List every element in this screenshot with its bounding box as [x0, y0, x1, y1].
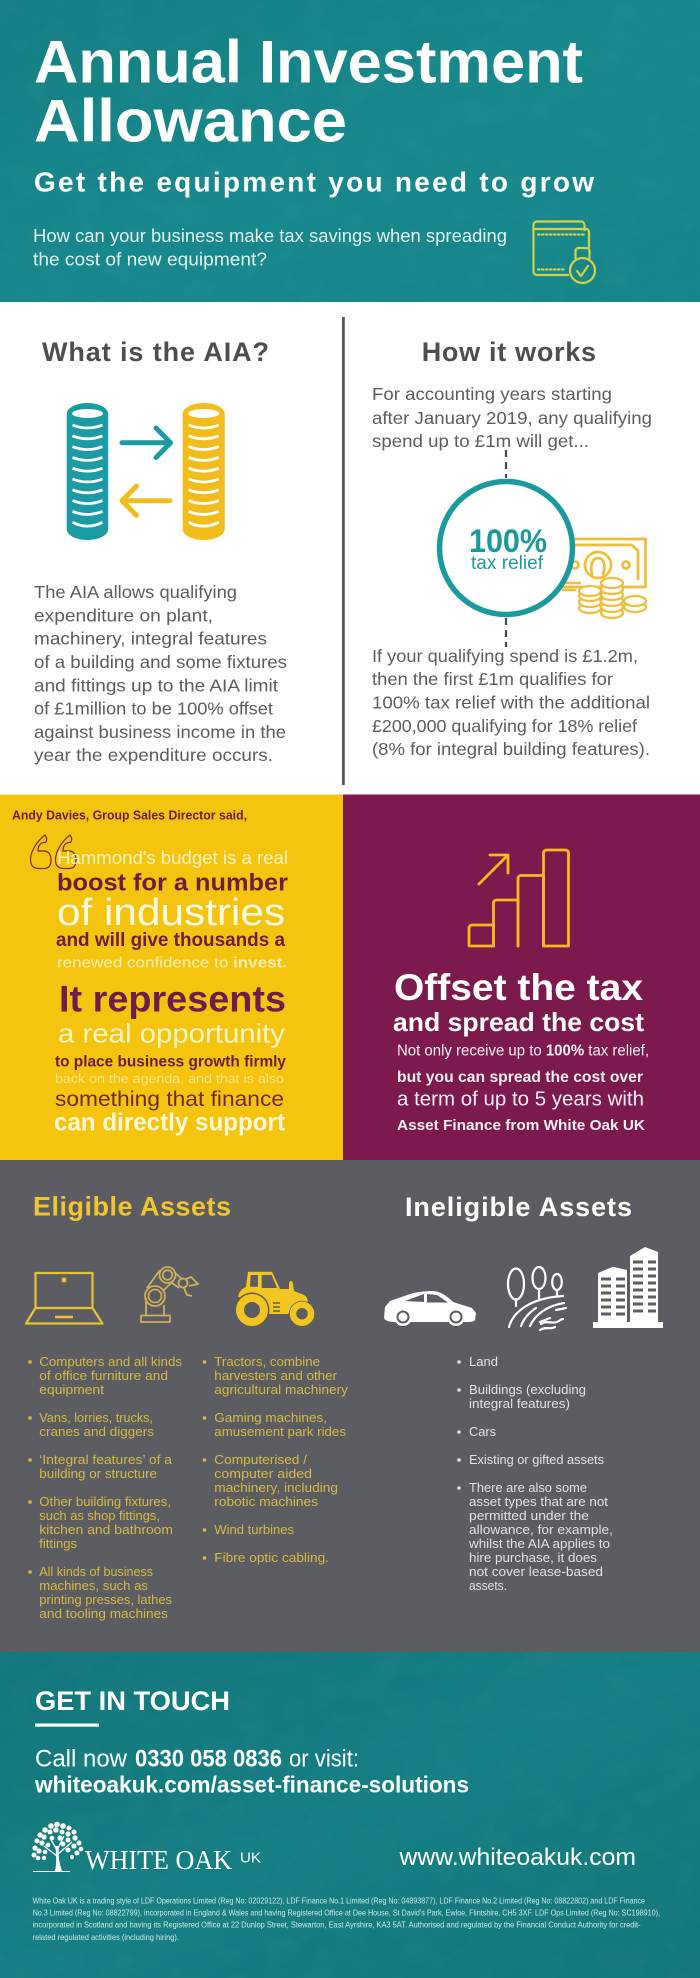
- list: eligible assets column two: Computerised /: [214, 1452, 307, 1467]
- text: qualifying spend example: then the first £1m qualifies for: [372, 669, 613, 689]
- heading: eligible assets: Eligible Assets: [33, 1192, 231, 1222]
- heading: what is the AIA: What is the AIA?: [42, 337, 269, 367]
- heading: how it works: How it works: [422, 337, 596, 367]
- list: ineligible assets: There are also some: [469, 1480, 587, 1495]
- dashed connector: top: [505, 450, 507, 478]
- quote text: Hammond's budget is a real: [57, 848, 288, 868]
- list: eligible assets column one: printing presses, lathes: [39, 1592, 172, 1607]
- panel: offset the tax: [343, 794, 700, 1160]
- list: eligible assets column two: Tractors, combine: [214, 1354, 320, 1369]
- list: eligible assets column one: of office furniture and: [39, 1368, 168, 1383]
- heading: ineligible assets: Ineligible Assets: [405, 1192, 632, 1222]
- text: AIA explanation: of a building and some fixtures: [34, 652, 287, 672]
- text: qualifying spend example: [372, 646, 650, 759]
- subheading: spread the cost: and spread the cost: [393, 1007, 644, 1037]
- list: ineligible assets: not cover lease-based: [469, 1564, 603, 1579]
- list: ineligible assets: permitted under the: [469, 1508, 589, 1523]
- list: eligible assets column two: Wind turbines: [214, 1522, 294, 1537]
- text: qualifying spend intro: For accounting years starting: [372, 384, 612, 404]
- contact details: Call now: [35, 1746, 128, 1773]
- website address: www.whiteoakuk.com: [398, 1844, 636, 1871]
- intro question: [33, 226, 507, 270]
- legal text: [33, 1896, 660, 1942]
- text: asset finance offer: a term of up to 5 years with: [397, 1088, 644, 1111]
- list: eligible assets column two: harvesters and other: [214, 1368, 338, 1383]
- list: eligible assets column two: Gaming machines,: [214, 1410, 327, 1425]
- list: eligible assets column one: [28, 1354, 183, 1621]
- divider: between AIA and how it works: [342, 317, 345, 785]
- contact details: or visit:: [289, 1746, 359, 1773]
- list: ineligible assets: asset types that are not: [469, 1494, 608, 1509]
- list: ineligible assets: assets.: [469, 1578, 507, 1593]
- panel: quote: [0, 794, 343, 1160]
- text: qualifying spend example: £200,000 qualifying for 18% relief: [372, 716, 637, 736]
- text: AIA explanation: of £1million to be 100% offset: [34, 698, 273, 718]
- text: qualifying spend example: (8% for integral building features).: [372, 739, 650, 759]
- list: eligible assets column one: Other building fixtures,: [39, 1494, 171, 1509]
- panel: assets: [0, 1160, 700, 1652]
- quote text: renewed confidence to invest.: [57, 954, 287, 971]
- quote text: a real opportunity: [58, 1019, 286, 1049]
- legal text: related regulated activities (including hiring).: [33, 1933, 179, 1942]
- text: AIA explanation: machinery, integral features: [34, 629, 267, 649]
- list: eligible assets column one: such as shop fittings,: [39, 1508, 160, 1523]
- panel: how it works: [372, 337, 652, 759]
- icon: rising bar chart with arrow: [469, 850, 568, 946]
- icon: laptop: [26, 1273, 102, 1324]
- text: AIA explanation: [34, 582, 287, 765]
- list: eligible assets column one: fittings: [39, 1536, 77, 1551]
- list: eligible assets column one: cranes and diggers: [39, 1424, 155, 1439]
- text: qualifying spend example: 100% tax relief with the additional: [372, 692, 650, 712]
- quote text: [54, 848, 288, 1137]
- legal text: incorporated in Scotland and having its Registered Office at 22 Dunlop Street, Stewarton, East Ayrshire, KA3 5AT. Authorised and regulated by the Financial Conduct Authority for credit-: [33, 1921, 641, 1930]
- icon: car: [384, 1291, 476, 1326]
- list: ineligible assets: Cars: [469, 1424, 496, 1439]
- text: qualifying spend intro: [372, 384, 652, 451]
- attribution: Andy Davies, Group Sales Director said,: [12, 807, 247, 822]
- subtitle: Get the equipment you need to grow: [34, 167, 594, 198]
- text: asset finance offer: [397, 1043, 649, 1134]
- list: ineligible assets: hire purchase, it does: [469, 1550, 598, 1565]
- quote text: It represents: [59, 979, 286, 1020]
- quote text: boost for a number: [57, 870, 288, 897]
- callout: 100% tax relief circle: 100%: [469, 523, 547, 559]
- title: [34, 29, 583, 155]
- text: AIA explanation: expenditure on plant,: [34, 605, 213, 625]
- contact details: whiteoakuk.com/asset-finance-solutions: [34, 1772, 469, 1798]
- arrow: right teal: [122, 428, 170, 458]
- text: asset finance offer: Not only receive up to 100% tax relief,: [397, 1043, 649, 1060]
- intro question: How can your business make tax savings when spreading: [33, 226, 507, 246]
- list: ineligible assets: integral features): [469, 1396, 570, 1411]
- text: qualifying spend intro: spend up to £1m will get...: [372, 431, 589, 451]
- list: eligible assets column two: agricultural machinery: [214, 1382, 349, 1397]
- list: eligible assets column one: equipment: [39, 1382, 104, 1397]
- panel: header: [0, 0, 700, 302]
- list: ineligible assets: Buildings (excluding: [469, 1382, 586, 1397]
- title: Allowance: [34, 88, 347, 155]
- callout: 100% tax relief circle: tax relief: [471, 553, 544, 574]
- list: ineligible assets: whilst the AIA applies to: [468, 1536, 610, 1551]
- text: qualifying spend intro: after January 2019, any qualifying: [372, 408, 652, 428]
- quote text: something that finance: [55, 1088, 284, 1111]
- list: eligible assets column one: Vans, lorries, trucks,: [39, 1410, 153, 1425]
- list: eligible assets column two: amusement park rides: [214, 1424, 346, 1439]
- list: eligible assets column one: kitchen and bathroom: [39, 1522, 173, 1537]
- arrow: left yellow: [122, 486, 170, 516]
- list: eligible assets column two: machinery, including: [214, 1480, 338, 1495]
- text: asset finance offer: but you can spread the cost over: [397, 1069, 643, 1086]
- list: ineligible assets: Land: [469, 1354, 498, 1369]
- list: eligible assets column two: computer aided: [214, 1466, 312, 1481]
- icon: trees and land: [508, 1267, 566, 1330]
- icon: teal coin stack: [67, 403, 108, 540]
- icon: yellow coin stack: [183, 403, 225, 540]
- list: eligible assets column two: Fibre optic cabling.: [214, 1550, 329, 1565]
- intro question: the cost of new equipment?: [33, 250, 267, 270]
- icon: wallet with lock: [534, 222, 595, 283]
- list: eligible assets column one: All kinds of business: [39, 1564, 153, 1579]
- text: AIA explanation: The AIA allows qualifying: [34, 582, 237, 602]
- quote text: to place business growth firmly: [55, 1054, 286, 1071]
- heading: get in touch: GET IN TOUCH: [35, 1686, 230, 1716]
- quote text: back on the agenda, and that is also: [55, 1071, 284, 1086]
- list: ineligible assets: [457, 1354, 613, 1593]
- logo: white oak uk: [32, 1822, 261, 1875]
- icon: robot arm: [141, 1267, 198, 1322]
- list: eligible assets column one: Computers and all kinds: [39, 1354, 183, 1369]
- icon: banknote and coins: [550, 539, 646, 618]
- text: AIA explanation: against business income in the: [34, 722, 286, 742]
- list: ineligible assets: allowance, for example,: [469, 1522, 613, 1537]
- text: AIA explanation: and fittings up to the AIA limit: [34, 676, 278, 696]
- heading: offset the tax: Offset the tax: [394, 967, 643, 1008]
- list: eligible assets column two: [203, 1354, 349, 1565]
- list: eligible assets column one: building or structure: [39, 1466, 157, 1481]
- logo: white oak uk: WHITE OAK: [85, 1845, 232, 1875]
- contact details: 0330 058 0836: [135, 1746, 282, 1773]
- quote text: can directly support: [54, 1109, 286, 1137]
- icon: office buildings: [593, 1247, 663, 1328]
- logo: white oak uk: UK: [240, 1850, 261, 1867]
- quote text: and will give thousands a: [56, 929, 285, 951]
- icon: quote marks: [30, 835, 76, 868]
- list: ineligible assets: Existing or gifted assets: [469, 1452, 604, 1467]
- quote text: of industries: [57, 892, 285, 934]
- icon: tractor: [234, 1272, 315, 1328]
- text: qualifying spend example: If your qualifying spend is £1.2m,: [372, 646, 638, 666]
- underline: [35, 1724, 99, 1727]
- list: eligible assets column one: and tooling machines: [39, 1606, 169, 1621]
- title: Annual Investment: [34, 29, 583, 96]
- list: eligible assets column two: robotic machines: [214, 1494, 319, 1509]
- text: AIA explanation: year the expenditure occurs.: [34, 745, 273, 765]
- panel: what is the AIA: [34, 337, 287, 765]
- list: eligible assets column one: ‘Integral features’ of a: [39, 1452, 173, 1467]
- callout: 100% tax relief circle: [440, 482, 572, 614]
- panel: footer: [0, 1652, 700, 1978]
- text: asset finance offer: Asset Finance from White Oak UK: [397, 1117, 645, 1134]
- list: eligible assets column one: machines, such as: [39, 1578, 148, 1593]
- dashed connector: bottom: [505, 618, 507, 647]
- contact details: [34, 1746, 469, 1798]
